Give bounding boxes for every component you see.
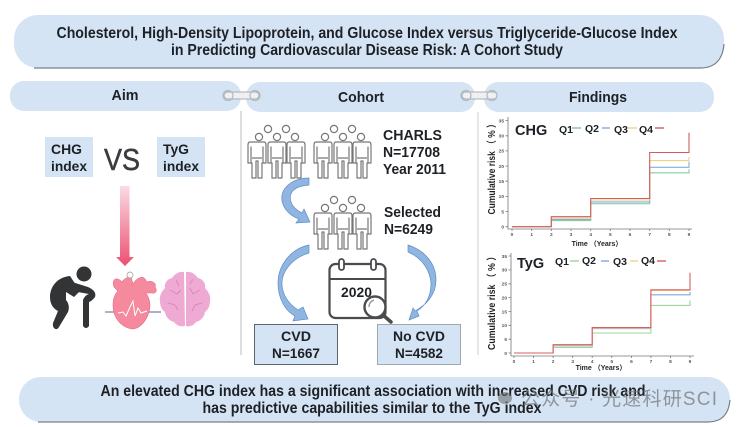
heading and legend: TyG: Q3: [613, 256, 627, 268]
icon: heart with ECG: [105, 272, 161, 329]
title banner: Cholesterol, High-Density Lipoprotein, and Glucose Index versus Triglyceride-Glucose Index: [56, 25, 678, 42]
box: CVD: CVD: [281, 328, 311, 344]
series: Q3: [514, 286, 690, 353]
box: No CVD: [378, 324, 460, 364]
chart: TyG cumulative risk: [486, 252, 694, 372]
heading and legend: TyG: Q2: [582, 255, 596, 267]
icon: selected crowd: [314, 196, 371, 249]
arrow: down gradient: [116, 186, 134, 266]
x ticks: 6: [629, 232, 632, 238]
y ticks: 15: [502, 309, 507, 315]
connector: Aim to Cohort: [223, 90, 260, 100]
conclusion banner: has predictive capabilities similar to the TyG index: [202, 400, 542, 417]
panel header: Findings: Findings: [569, 89, 627, 106]
heading and legend: TyG: [517, 255, 666, 272]
heading and legend: TyG: TyG: [517, 256, 544, 272]
text: selected sample: [384, 205, 441, 238]
panel header: Aim: [10, 81, 241, 111]
conclusion banner: An elevated CHG index has a significant association with increased CVD risk and: [100, 383, 646, 400]
series: Q3: [512, 157, 689, 227]
TyG index label: [157, 137, 205, 177]
series: Q1: [514, 300, 690, 353]
panel: cohort flow: [248, 125, 460, 365]
x axis title: Time （Years）: [572, 240, 622, 248]
x ticks: 4: [591, 359, 594, 365]
watermark: 公众号 · 光速科研SCI: [521, 388, 717, 410]
box: CVD: [254, 324, 338, 364]
y ticks: 10: [502, 323, 507, 329]
y ticks: 20: [499, 164, 504, 170]
icon: brain: [160, 272, 210, 326]
text: selected sample: N=6249: [384, 222, 433, 238]
heading and legend: CHG: Q1: [559, 124, 573, 136]
CHG index label: index: [51, 158, 87, 174]
icon: CHARLS crowd right: [314, 125, 371, 178]
title banner: [14, 15, 724, 68]
TyG index label: TyG: [163, 141, 189, 157]
text: selected sample: Selected: [384, 205, 441, 221]
y ticks: 35: [502, 254, 507, 260]
heading and legend: CHG: Q4: [639, 124, 653, 136]
text: CHARLS sample: Year 2011: [383, 162, 446, 178]
series: Q2: [512, 162, 689, 227]
x ticks: 7: [650, 359, 653, 365]
y axis title: Cumulative risk （ % ）: [486, 120, 498, 214]
heading and legend: CHG: [515, 123, 664, 139]
series: Q1: [512, 169, 689, 227]
panel header: Cohort: Cohort: [338, 89, 384, 106]
y ticks: 30: [502, 268, 507, 274]
x ticks: 1: [532, 359, 535, 365]
title banner: in Predicting Cardiovascular Disease Risk: A Cohort Study: [171, 42, 563, 59]
x ticks: 6: [630, 359, 633, 365]
icon: CHARLS crowd left: [248, 125, 305, 178]
x ticks: 2: [550, 232, 553, 238]
y ticks: 5: [504, 337, 507, 343]
y ticks: 10: [499, 194, 504, 200]
text: CHARLS sample: N=17708: [383, 145, 440, 161]
TyG index label: index: [163, 158, 199, 174]
x ticks: 4: [589, 232, 592, 238]
text: CHARLS sample: CHARLS: [383, 128, 442, 144]
y ticks: 30: [499, 134, 504, 140]
x ticks: 5: [610, 359, 613, 365]
icon: elderly person with cane: [50, 266, 95, 329]
panel header: Findings: [484, 82, 714, 112]
x ticks: 8: [669, 359, 672, 365]
x ticks: 2: [552, 359, 555, 365]
box: No CVD: N=4582: [395, 345, 443, 361]
connector: Cohort to Findings: [461, 90, 497, 100]
y ticks: 35: [499, 118, 504, 124]
y axis title: Cumulative risk （ % ）: [486, 252, 498, 350]
CHG index label: [45, 137, 93, 177]
x ticks: 9: [689, 359, 692, 365]
y ticks: 0: [504, 351, 507, 357]
heading and legend: CHG: Q3: [614, 124, 628, 136]
y ticks: 20: [502, 295, 507, 301]
heading and legend: TyG: Q4: [641, 255, 655, 267]
VS label: VS: [104, 142, 140, 177]
heading and legend: TyG: Q1: [555, 256, 569, 268]
series: Q4: [514, 273, 690, 353]
series: Q2: [514, 292, 690, 353]
panel header: Aim: Aim: [112, 87, 138, 104]
arrow: CHARLS to Selected: [282, 178, 310, 223]
x ticks: 3: [571, 359, 574, 365]
x ticks: [511, 232, 691, 238]
CHG index label: CHG: [51, 141, 82, 157]
x ticks: 1: [530, 232, 533, 238]
panel header: Cohort: [246, 82, 475, 112]
y ticks: [502, 254, 507, 357]
heading and legend: CHG: CHG: [515, 123, 547, 139]
panel: aim content: [45, 137, 210, 329]
x ticks: 0: [511, 232, 514, 238]
chart: CHG cumulative risk: [486, 117, 692, 248]
icon: calendar 2020 with magnifier: [330, 259, 391, 322]
x ticks: [513, 359, 692, 365]
x ticks: 3: [570, 232, 573, 238]
arrow: Selected to CVD: [278, 245, 309, 321]
y ticks: 5: [501, 209, 504, 215]
y ticks: 15: [499, 179, 504, 185]
x ticks: 9: [688, 232, 691, 238]
series: Q4: [512, 133, 689, 227]
x axis title: Time （Years）: [576, 364, 626, 372]
x ticks: 7: [648, 232, 651, 238]
x ticks: 8: [668, 232, 671, 238]
arrow: Selected to No CVD: [408, 245, 436, 320]
y ticks: [499, 118, 504, 230]
x ticks: 5: [609, 232, 612, 238]
y ticks: 25: [499, 149, 504, 155]
box: CVD: N=1667: [272, 345, 320, 361]
x ticks: 0: [513, 359, 516, 365]
y ticks: 25: [502, 282, 507, 288]
box: No CVD: No CVD: [393, 328, 445, 344]
y ticks: 0: [501, 224, 504, 230]
heading and legend: CHG: Q2: [585, 123, 599, 135]
conclusion banner: [19, 377, 730, 422]
text: CHARLS sample: [383, 128, 446, 178]
icon: calendar 2020 with magnifier: 2020: [341, 285, 372, 300]
